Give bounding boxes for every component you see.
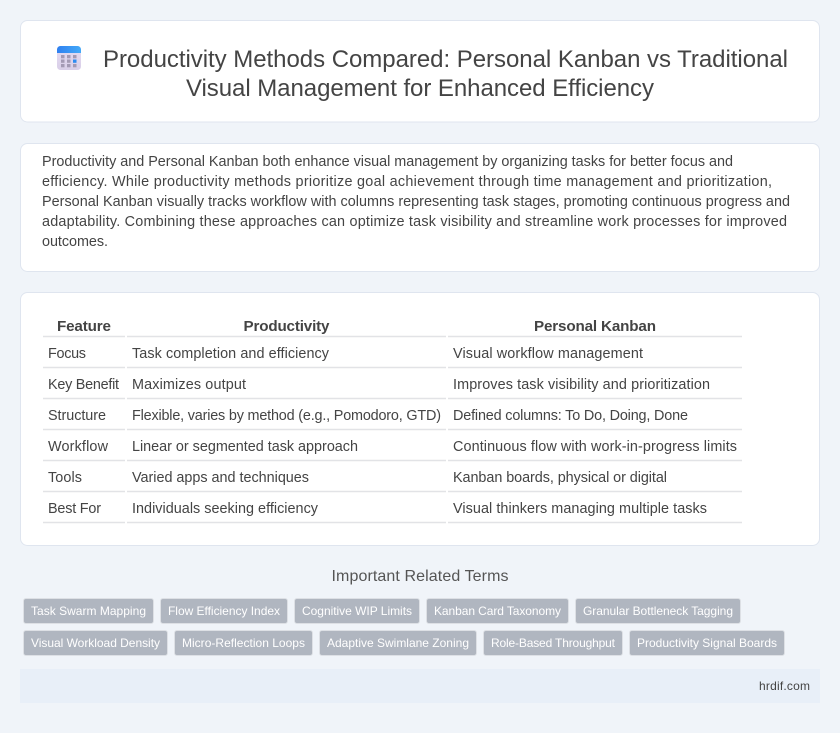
table row: Tools: Tools xyxy=(48,470,82,486)
table row: Workflow: Continuous flow with work-in-progress limits xyxy=(453,439,737,455)
footer: hrdif.com xyxy=(759,679,810,693)
tag xyxy=(426,598,568,624)
tag row 2 xyxy=(24,630,784,656)
tag xyxy=(576,598,740,624)
table row: Workflow xyxy=(48,439,737,455)
table row: Focus: Visual workflow management xyxy=(453,346,643,362)
tag xyxy=(160,598,288,624)
tag row 1 xyxy=(24,598,740,624)
tag xyxy=(320,630,476,656)
table row: Key Benefit xyxy=(48,377,710,393)
footer xyxy=(20,669,820,703)
tag xyxy=(630,630,784,656)
table row: Structure: Flexible, varies by method (e.g., Pomodoro, GTD) xyxy=(132,408,441,424)
tag: Flow Efficiency Index xyxy=(168,604,280,618)
table row: Key Benefit: Improves task visibility and prioritization xyxy=(453,377,710,393)
text block: introduction: Productivity and Personal Kanban both enhance visual management by organizing tasks for better focus and xyxy=(42,154,733,170)
table row: Workflow: Workflow xyxy=(48,439,109,455)
text block: introduction: outcomes. xyxy=(42,234,108,250)
tag xyxy=(24,598,154,624)
table row: Focus: Task completion and efficiency xyxy=(132,346,330,362)
table row: Best For: Visual thinkers managing multiple tasks xyxy=(453,501,707,517)
tag: Adaptive Swimlane Zoning xyxy=(327,636,469,650)
tag xyxy=(484,630,622,656)
tag xyxy=(174,630,312,656)
table row: Structure: Defined columns: To Do, Doing, Done xyxy=(453,408,688,424)
tag: Micro-Reflection Loops xyxy=(182,636,305,650)
text block: introduction xyxy=(42,154,790,250)
tag: Granular Bottleneck Tagging xyxy=(583,604,733,618)
icon: calendar xyxy=(57,46,81,70)
table row: Structure: Structure xyxy=(48,408,106,424)
table row: Focus xyxy=(48,346,643,362)
title: Visual Management for Enhanced Efficiency xyxy=(186,75,654,102)
tag: Task Swarm Mapping xyxy=(31,604,146,618)
table row: Key Benefit: Key Benefit xyxy=(48,377,119,393)
tag xyxy=(24,630,168,656)
panel: introduction paragraph xyxy=(20,144,820,272)
table row: Tools: Kanban boards, physical or digital xyxy=(453,470,667,486)
table row: Focus: Focus xyxy=(48,346,86,362)
table header xyxy=(57,318,656,335)
table row: Best For: Individuals seeking efficiency xyxy=(132,501,319,517)
tag: Visual Workload Density xyxy=(31,636,160,650)
text block: introduction: efficiency. While productivity methods prioritize goal achievement through time management and prioritization, xyxy=(42,174,772,190)
table row: Workflow: Linear or segmented task approach xyxy=(132,439,358,455)
title xyxy=(103,46,788,102)
text block: introduction: Personal Kanban visually tracks workflow with columns representing task stages, promoting continuous progress and xyxy=(42,194,790,210)
table row: Structure xyxy=(48,408,688,424)
tag: Productivity Signal Boards xyxy=(637,636,777,650)
panel: comparison table xyxy=(20,292,820,546)
table row: Key Benefit: Maximizes output xyxy=(132,377,246,393)
table header: Personal Kanban xyxy=(534,318,656,335)
table header: Feature xyxy=(57,318,111,335)
text block: introduction: adaptability. Combining these approaches can optimize task visibility and streamline work processes for improved xyxy=(42,214,787,230)
table row: Tools xyxy=(48,470,667,486)
header panel xyxy=(20,20,820,122)
tag: Kanban Card Taxonomy xyxy=(434,604,561,618)
table row: Best For: Best For xyxy=(48,501,101,517)
title: Productivity Methods Compared: Personal Kanban vs Traditional xyxy=(103,46,788,73)
heading: important related terms: Important Related Terms xyxy=(332,568,508,585)
table header: Productivity xyxy=(244,318,330,335)
tag xyxy=(294,598,420,624)
table row: Tools: Varied apps and techniques xyxy=(132,470,309,486)
table row: Best For xyxy=(48,501,707,517)
tag: Cognitive WIP Limits xyxy=(302,604,412,618)
tag: Role-Based Throughput xyxy=(491,636,616,650)
